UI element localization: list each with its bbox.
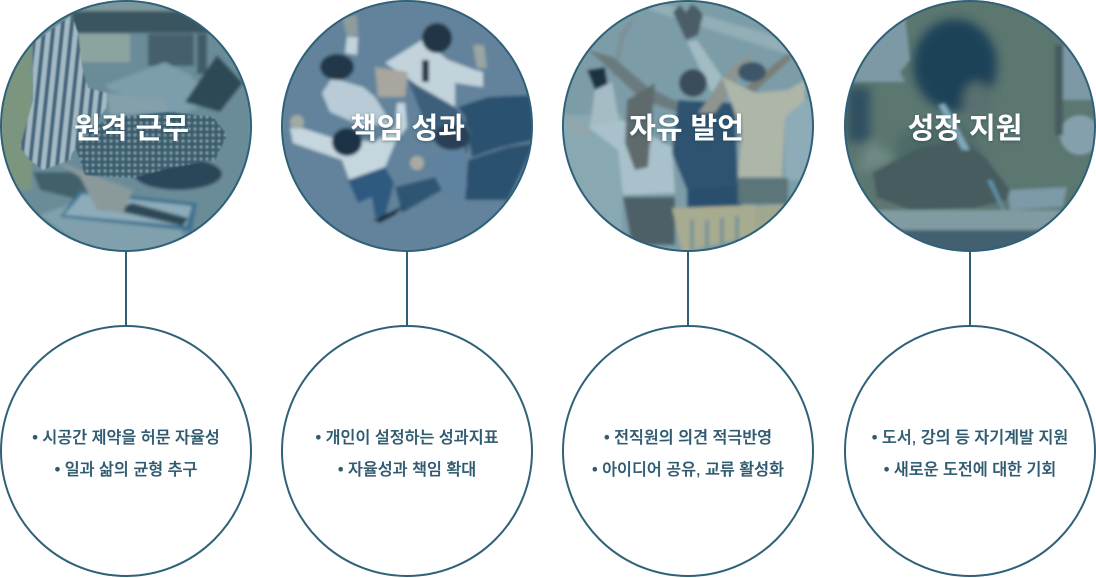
text block: • 자율성과 책임 확대	[338, 461, 476, 479]
text block: • 일과 삶의 균형 추구	[55, 461, 198, 479]
ring	[282, 1, 532, 251]
panel: free speech details	[563, 326, 813, 576]
text block: • 아이디어 공유, 교류 활성화	[592, 461, 784, 479]
heading: 책임 성과	[350, 112, 465, 145]
connector lines	[126, 250, 970, 327]
photo circle: responsibility and results	[281, 0, 535, 252]
text block: • 도서, 강의 등 자기계발 지원	[872, 429, 1068, 447]
ring	[1, 1, 251, 251]
photo circle: free speech	[562, 0, 815, 252]
photo circle: remote work	[0, 0, 252, 252]
text block: • 새로운 도전에 대한 기회	[884, 461, 1056, 479]
text block	[316, 429, 499, 479]
heading: 원격 근무	[74, 112, 189, 145]
text block	[872, 429, 1068, 479]
heading: 성장 지원	[908, 112, 1022, 145]
text block	[592, 429, 784, 479]
text block: • 시공간 제약을 허문 자율성	[32, 429, 220, 447]
ring	[845, 1, 1095, 251]
text block: • 전직원의 의견 적극반영	[604, 429, 772, 447]
panel: responsibility details	[282, 326, 532, 576]
panel: growth support details	[845, 326, 1095, 576]
ring	[563, 1, 813, 251]
text block	[32, 429, 220, 479]
photo circle: growth support	[844, 0, 1096, 255]
text block: • 개인이 설정하는 성과지표	[316, 429, 499, 447]
heading: 자유 발언	[629, 112, 744, 145]
panel: remote work details	[1, 326, 251, 576]
